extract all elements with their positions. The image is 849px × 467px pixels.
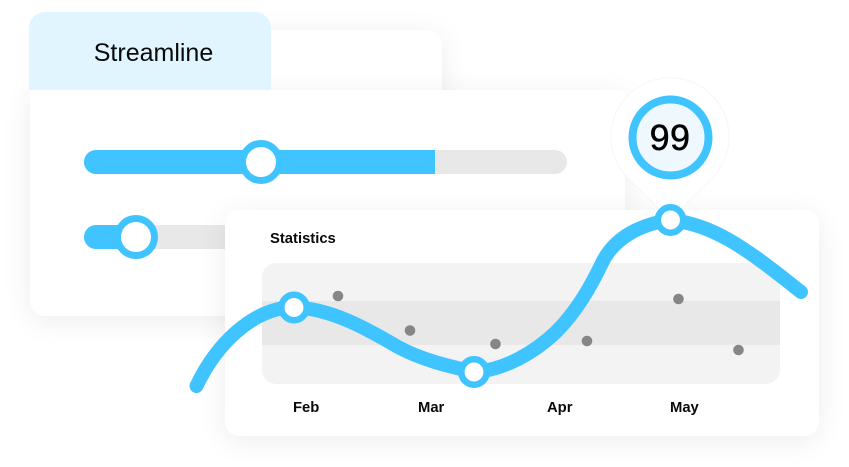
chart background band xyxy=(262,263,780,384)
icon: map pin callout: 99 xyxy=(650,117,690,158)
marker: Mar xyxy=(461,359,487,385)
panel: back card xyxy=(200,30,442,130)
marker: May xyxy=(658,207,683,233)
label: May: May xyxy=(670,400,699,416)
slider 1 xyxy=(84,150,567,174)
slider 1 knob xyxy=(238,140,282,184)
icon: map pin callout xyxy=(611,78,729,220)
panel: streamline tab xyxy=(29,12,271,90)
slider 2 knob xyxy=(114,214,158,258)
slider 2 fill xyxy=(84,225,134,249)
scatter dots xyxy=(333,291,744,355)
slider 2 xyxy=(84,225,284,249)
panel: sliders card xyxy=(30,90,625,316)
heading: Streamline: Streamline xyxy=(94,39,213,67)
label: Feb: Feb xyxy=(293,400,319,416)
label: Mar: Mar xyxy=(418,400,444,416)
slider 1 fill xyxy=(84,150,435,174)
panel: statistics card xyxy=(225,210,819,436)
line series xyxy=(196,220,801,386)
marker: Feb xyxy=(281,295,307,320)
heading: Statistics: Statistics xyxy=(270,231,336,247)
label: Apr: Apr xyxy=(547,400,572,416)
